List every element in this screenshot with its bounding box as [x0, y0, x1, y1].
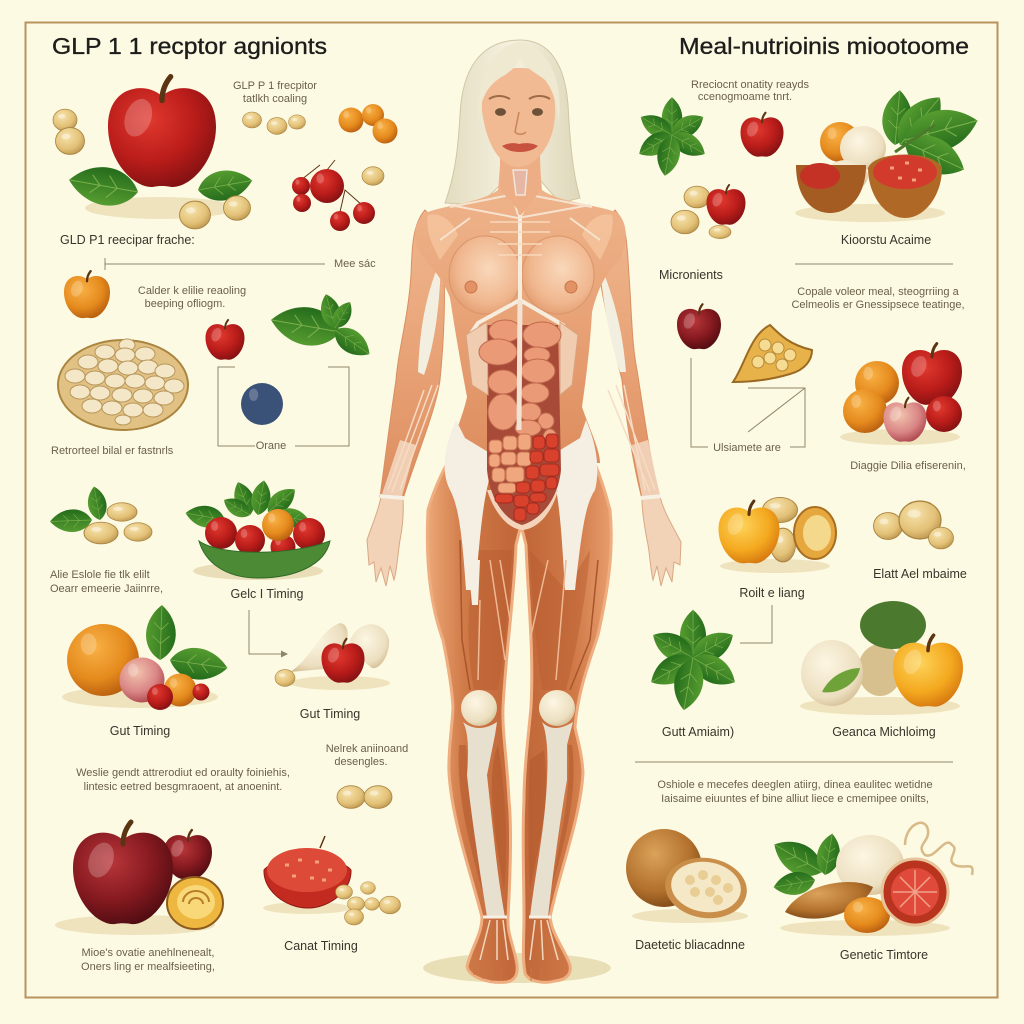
food: leaves and nuts — [50, 485, 152, 544]
food: fruit group — [840, 344, 962, 445]
face — [482, 68, 555, 167]
food: coins — [53, 109, 84, 154]
central mesentery — [519, 300, 520, 430]
right hand — [642, 497, 681, 586]
label: roilt: Roilt e liang — [739, 586, 805, 600]
heading: left: GLP 1 1 recptor agnionts — [52, 33, 327, 59]
divider line — [795, 263, 953, 265]
food: three nuts — [874, 501, 954, 549]
chest and neck tendons — [468, 215, 572, 340]
text: nelrek note: Nelrek aniinoand — [326, 743, 408, 755]
food: apple with nuts — [671, 185, 746, 239]
food: bowls and parsley — [795, 87, 983, 222]
food: leaves almond and red half — [767, 823, 973, 936]
text: oshiole note: Oshiole e mecefes deeglen atiirg, dinea eaulitec wetidne — [657, 779, 933, 791]
food: small oranges — [338, 104, 398, 144]
text: alie note line 2: Oearr emeerie Jaiinrre, — [50, 583, 163, 595]
ground shadow — [423, 953, 611, 983]
label: geanca: Geanca Michloimg — [832, 725, 936, 739]
label: elatt: Elatt Ael mbaime — [873, 567, 967, 581]
label: kioorstu: Kioorstu Acaime — [841, 233, 931, 247]
label: ulsiamete: Ulsiamete are — [713, 442, 781, 454]
label: retroreel: Retrorteel bilal er fastnrls — [51, 445, 174, 457]
text: calder note: Calder k elilie reaoling — [138, 285, 246, 297]
label: gut timing 2: Gut Timing — [300, 707, 360, 721]
small intestine loops — [479, 320, 561, 447]
windpipe — [513, 170, 527, 195]
text: mioe note: Mioe's ovatie anehlnenealt, — [82, 947, 214, 959]
right breast — [522, 236, 594, 314]
nose — [515, 112, 526, 134]
neck — [500, 155, 541, 214]
left arm tendon — [418, 258, 441, 375]
deltoid highlights — [427, 214, 613, 260]
anatomical figure — [367, 40, 681, 983]
food: nut cluster — [336, 882, 400, 925]
red colon cells — [495, 434, 559, 521]
text: receptor note line 2: tatlkh coaling — [243, 93, 307, 105]
nipples — [465, 281, 577, 293]
label: genetic: Genetic Timtore — [840, 948, 928, 962]
food: dark apples — [55, 822, 223, 935]
right knee — [539, 690, 575, 726]
food: yellow apple with nuts — [718, 497, 836, 573]
food: big apple — [66, 77, 255, 229]
heading: right: Meal-nutrioinis miootoome — [679, 33, 969, 59]
text: copale note: Copale voleor meal, steogrriing a — [797, 286, 960, 298]
label: orane: Orane — [256, 440, 286, 452]
label: mee sac: Mee sác — [334, 258, 376, 270]
rib lines — [490, 222, 550, 255]
collar tendons — [440, 170, 600, 240]
eyebrows — [489, 96, 550, 99]
forearm pale wedges — [382, 440, 660, 496]
forearm tendons — [388, 385, 655, 492]
food: dark apple — [677, 304, 721, 349]
connector line — [105, 258, 325, 270]
text: nelrek note line 2: desengles. — [334, 756, 388, 768]
bracket lines — [218, 367, 349, 446]
food: golden pod — [733, 325, 812, 382]
torso — [415, 165, 626, 463]
label: micronients: Micronients — [659, 268, 723, 282]
side organs — [466, 322, 578, 395]
food: red half — [263, 836, 351, 914]
food: blueberry — [241, 383, 283, 425]
food: orange apple — [64, 271, 110, 318]
food: fruit group — [62, 605, 230, 710]
label: gut timing: Gut Timing — [110, 724, 170, 738]
panel: right column — [626, 79, 983, 962]
food: cherries — [292, 160, 384, 231]
label: gutt amiaim: Gutt Amiaim) — [662, 725, 734, 739]
left shin tendon — [463, 722, 505, 917]
foot tendons — [480, 920, 558, 960]
calf muscle shading — [459, 745, 574, 890]
label: diaggie: Diaggie Dilia efiserenin, — [850, 460, 966, 472]
food: garlic and apple — [275, 623, 390, 690]
food: large basil — [645, 610, 741, 713]
food: oats plate — [58, 339, 188, 430]
food: cream and yellow group — [800, 601, 963, 715]
text: weslie note: Weslie gendt attrerodiut ed oraulty foiniehis, — [76, 767, 290, 779]
text: alie note: Alie Eslole fie tlk elilt — [50, 569, 150, 581]
right arm tendon — [600, 262, 626, 372]
hair back — [445, 40, 580, 205]
text: mioe note line 2: Oners ling er mealfsieeting, — [81, 961, 215, 973]
food: small nuts — [242, 112, 306, 134]
eyes — [495, 108, 543, 116]
left hand — [367, 497, 403, 586]
colon cells — [489, 434, 531, 493]
pelvis wrap — [445, 420, 492, 590]
food: tomato — [206, 320, 244, 360]
legs — [427, 420, 611, 982]
hair front — [478, 42, 560, 125]
text: copale note line 2: Celmeolis er Gnessipsece teatinge, — [791, 299, 965, 311]
food: tomato bowl — [184, 479, 330, 580]
label: canat timing: Canat Timing — [284, 939, 358, 953]
divider line — [635, 761, 953, 763]
food: two nuts — [337, 786, 392, 808]
food: basil leaves — [268, 292, 376, 363]
ankle straps — [483, 916, 551, 918]
text: calder note line 2: beeping ofliogm. — [145, 298, 225, 310]
left breast — [449, 236, 521, 314]
food: apple — [740, 113, 784, 157]
connector line — [740, 605, 772, 643]
right arm — [598, 210, 660, 499]
left knee — [461, 690, 497, 726]
abdominal cavity — [487, 325, 561, 525]
text: reciocnt note: Rreciocnt onatity reayds — [691, 79, 809, 91]
toes — [474, 964, 559, 981]
text: reciocnt note line 2: ccenogmoame tnrt. — [698, 91, 792, 103]
wrist bands — [380, 496, 661, 498]
panel: left column — [50, 77, 408, 973]
food: basil — [634, 97, 710, 178]
text: receptor note: GLP P 1 frecpitor — [233, 80, 317, 92]
arrow — [249, 610, 288, 658]
left arm — [380, 210, 444, 499]
label: gelc timing: Gelc I Timing — [231, 587, 304, 601]
thigh tendons — [468, 560, 480, 605]
bracket and diagonal lines — [691, 358, 805, 447]
text: oshiole note line 2: Iaisaime eiuuntes ef bine alliut liece e cmemipee onilts, — [661, 793, 929, 805]
right shin tendon — [530, 722, 573, 917]
thigh muscle shading — [468, 550, 590, 690]
food: brown nut and half — [626, 829, 751, 923]
pelvis base — [487, 490, 558, 530]
label: receptor: GLD P1 reecipar frache: — [60, 233, 195, 247]
label: daetetic: Daetetic bliacadnne — [635, 938, 745, 952]
lips — [502, 143, 538, 152]
text: weslie note line 2: lintesic eetred besgmraoent, at anoenint. — [84, 781, 282, 793]
